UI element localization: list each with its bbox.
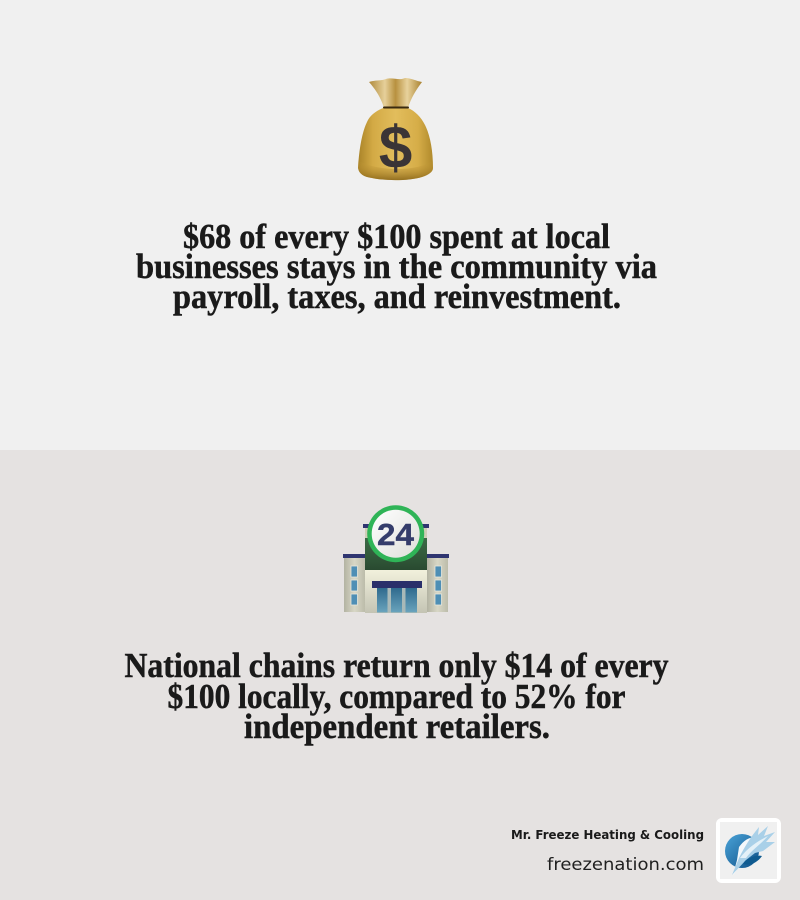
icon: money bag: [358, 78, 433, 181]
icon: money bag: $: [379, 114, 412, 181]
panel: national chains: [0, 450, 800, 900]
icon: 24-hour store building: 24: [377, 517, 415, 552]
heading: national chains statistic: [124, 647, 668, 746]
icon: 24-hour store building: [343, 505, 449, 613]
heading: national chains statistic: independent retailers.: [244, 708, 550, 746]
website: freezenation.com: [547, 855, 704, 875]
heading: national chains statistic: $100 locally, compared to 52% for: [168, 678, 626, 716]
panel: local businesses: [0, 0, 800, 450]
logo: Mr. Freeze emblem: [716, 818, 781, 883]
heading: local businesses statistic: $68 of every $100 spent at local: [183, 218, 610, 256]
heading: local businesses statistic: [136, 218, 657, 316]
heading: national chains statistic: National chains return only $14 of every: [124, 647, 668, 685]
heading: local businesses statistic: businesses stays in the community via: [136, 248, 657, 286]
brand name: Mr. Freeze Heating & Cooling: [511, 828, 704, 842]
heading: local businesses statistic: payroll, taxes, and reinvestment.: [173, 278, 621, 316]
